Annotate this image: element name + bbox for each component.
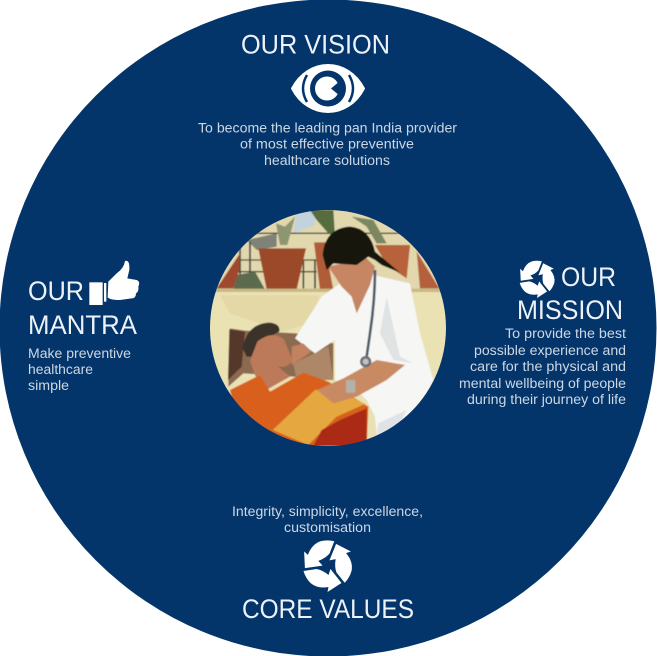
heading: our mantra: OUR [28, 276, 84, 306]
heading: our mission: MISSION [517, 295, 623, 325]
doctor face and neck [328, 258, 375, 313]
icon: circular arrows, core values [297, 531, 363, 592]
heading: our mission: OUR [561, 262, 616, 292]
photo: doctor caring for elderly patient [207, 207, 450, 450]
icon: eye [292, 65, 364, 112]
section: our vision [198, 30, 458, 168]
text: mission statement: care for the physical and [470, 359, 626, 374]
section: our mantra [28, 261, 139, 393]
doctor hair [323, 227, 400, 273]
text: mission statement: during their journey of life [467, 392, 626, 407]
text: core values list: customisation [284, 520, 371, 535]
text: mission statement: possible experience and [474, 343, 626, 358]
heading: core values: CORE VALUES [242, 594, 414, 624]
text: core values list [232, 504, 423, 535]
icon: thumbs up [89, 261, 139, 305]
patient sari [230, 372, 369, 446]
icon: circular arrows, mission [515, 254, 562, 298]
text: mantra statement: simple [28, 378, 69, 393]
heading: our mantra: MANTRA [28, 310, 137, 340]
text: mission statement [459, 326, 626, 407]
text: vision statement: of most effective preventive [240, 136, 414, 152]
text: mantra statement: Make preventive [28, 346, 131, 361]
text: vision statement: To become the leading pan India provider [198, 120, 458, 136]
patient hair [243, 323, 279, 357]
text: mission statement: To provide the best [505, 326, 626, 341]
doctor coat [295, 275, 433, 435]
text: mission statement: mental wellbeing of people [459, 376, 626, 391]
chair cushion [228, 328, 333, 387]
wall [207, 292, 443, 377]
text: mantra statement: healthcare [28, 362, 93, 377]
pots [258, 248, 306, 289]
text: vision statement [198, 120, 458, 168]
text: mantra statement [28, 346, 131, 393]
doctor arm and hand [292, 343, 312, 365]
heading: our mission [517, 262, 623, 325]
section: our mission [459, 254, 626, 407]
heading: our mantra [28, 276, 137, 340]
patient face and neck [250, 335, 292, 392]
stethoscope [367, 270, 375, 357]
heading: our vision: OUR VISION [241, 30, 390, 60]
text: vision statement: healthcare solutions [264, 153, 390, 168]
text: core values list: Integrity, simplicity, excellence, [232, 504, 423, 519]
section: core values [232, 504, 423, 624]
